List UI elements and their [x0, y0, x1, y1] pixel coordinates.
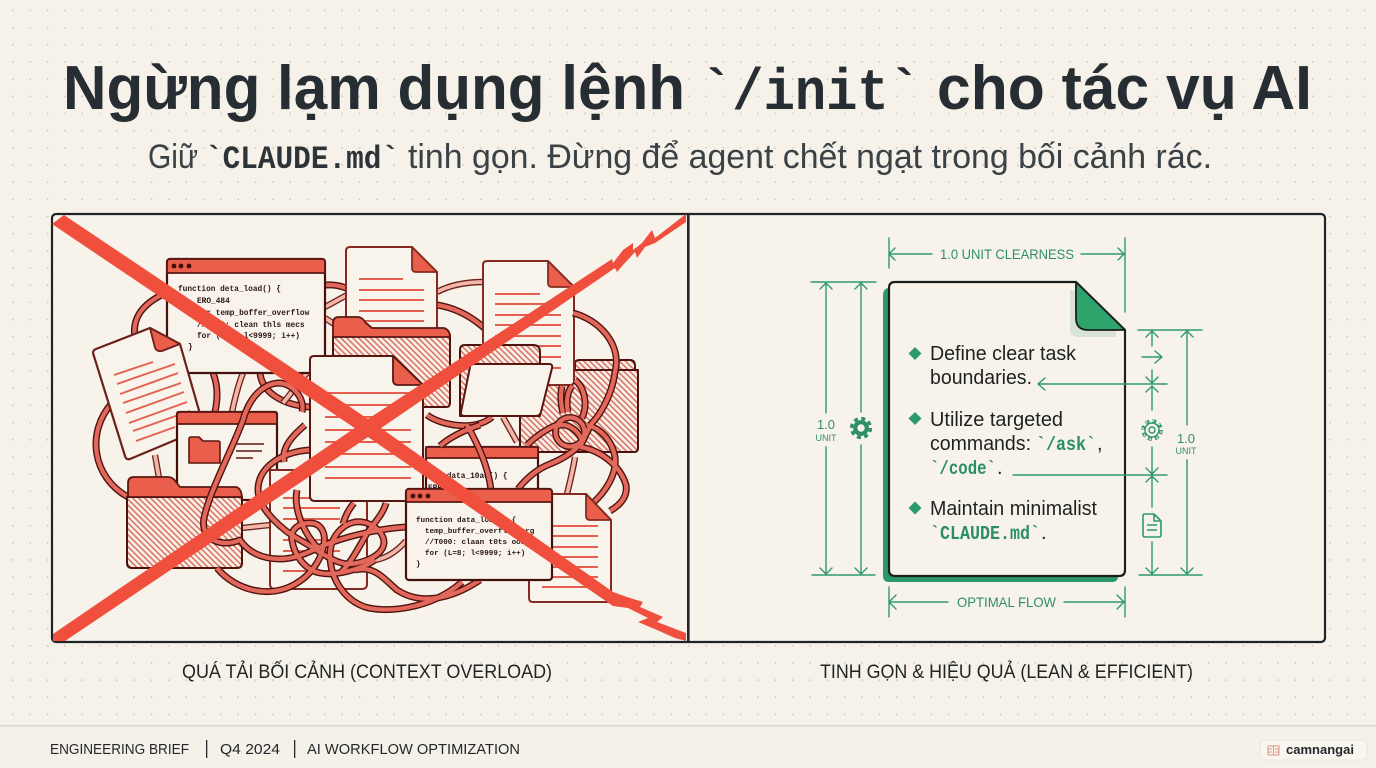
bullet 1: boundaries.: [930, 367, 1032, 389]
bullet 3: .: [1041, 522, 1047, 544]
subtitle: `CLAUDE.md`: [205, 141, 399, 178]
bullet 1: Define clear task: [930, 343, 1077, 365]
code window: top left: ERO_484: [197, 298, 230, 306]
caption: efficient: TINH GỌN & HIỆU QUẢ (LEAN & EFFICIENT): [820, 661, 1193, 683]
bullet 3: Maintain minimalist: [930, 498, 1097, 520]
bullet 3: `CLAUDE.md`: [930, 523, 1040, 545]
code window: front: function data_load() {: [416, 517, 516, 525]
right dimension: 1.0: [1177, 431, 1195, 446]
left dimension: [811, 282, 876, 575]
title: Ngừng lạm dụng lệnh: [63, 54, 685, 123]
code window: front: [406, 489, 552, 580]
subtitle: tinh gọn. Đừng để agent chết ngạt trong bối cảnh rác.: [408, 138, 1212, 176]
document: [889, 282, 1125, 576]
bullet 2: `/ask`: [1036, 434, 1096, 456]
code window: behind: ERR 404: [428, 485, 461, 493]
bullet 2: Utilize targeted: [930, 409, 1063, 431]
code window: front: for (L=8; l<9999; i++): [425, 550, 525, 558]
right dimension: [1013, 330, 1202, 575]
top dimension: 1.0 UNIT CLEARNESS: [940, 246, 1074, 262]
comparison frame: [52, 214, 1325, 642]
document shadow: [883, 288, 1118, 582]
icon: document: [1143, 514, 1161, 537]
fold shadow: [1070, 290, 1116, 337]
tangled cables: [204, 383, 480, 610]
folder: centre hatched: [333, 317, 450, 407]
folder: right hatched: [520, 360, 638, 452]
document: top centre: [346, 247, 437, 340]
footer: [0, 725, 1376, 768]
bullet 2: commands:: [930, 433, 1031, 455]
folder: lower left: [127, 477, 242, 568]
document: centre: [310, 356, 423, 501]
bullet 2: .: [997, 457, 1003, 479]
title: [63, 54, 1312, 127]
title: cho tác vụ AI: [937, 54, 1312, 123]
bullet 3: [908, 498, 1097, 545]
document: lower centre: [270, 470, 367, 589]
footer: AI WORKFLOW OPTIMIZATION: [307, 741, 520, 758]
icon: book: [1268, 746, 1279, 755]
title: `/init`: [701, 62, 920, 127]
left dimension: 1.0: [817, 417, 835, 432]
bullet 2: [908, 409, 1103, 480]
code window: top left: [167, 259, 325, 373]
left dimension: UNIT: [816, 433, 837, 443]
document: top right: [483, 261, 574, 385]
back cables: [96, 282, 517, 528]
bullet 2: `/code`: [930, 458, 996, 480]
right dimension: UNIT: [1176, 446, 1197, 456]
red cross: [52, 214, 686, 641]
divider: [687, 214, 690, 642]
code window: front: }: [416, 561, 421, 569]
fold: [1076, 282, 1125, 330]
code window: top left: //TODO: clean thls mecs: [197, 322, 305, 330]
subtitle: Giữ: [148, 138, 198, 176]
window: folder icon: [177, 412, 277, 500]
icon: solid gear: [852, 418, 870, 438]
bullet 2: ,: [1097, 433, 1103, 455]
code window: top left: var temp_boffer_overflow: [197, 310, 310, 318]
badge: camnangai: camnangai: [1286, 742, 1354, 757]
bullet 1: [908, 343, 1077, 389]
code window: front: temp_buffer_overflow_arg: [425, 528, 535, 536]
document: tilted: [93, 328, 204, 459]
bottom dimension: OPTIMAL FLOW: [957, 594, 1057, 610]
caption: overload: QUÁ TẢI BỐI CẢNH (CONTEXT OVERLOAD): [182, 661, 552, 683]
code window: top left: function deta_load() {: [178, 286, 281, 294]
badge: camnangai: [1260, 740, 1367, 760]
code window: top left: }: [188, 344, 193, 352]
code window: top left: for (i=0; l<9999; i++): [197, 333, 300, 341]
footer: ENGINEERING BRIEF: [50, 741, 189, 758]
code window: front: //T000: claan t0ts ooss: [425, 539, 530, 547]
top dimension: [889, 238, 1125, 312]
code window: behind: int data_10ad() {: [428, 473, 508, 481]
panel: context overload: [52, 214, 686, 641]
folder: open: [460, 345, 552, 416]
panel: lean and efficient: [811, 238, 1202, 617]
icon: outline gear: [1143, 421, 1161, 439]
document: lower right: [529, 494, 611, 602]
code window: behind: [426, 447, 538, 555]
knot cables: right: [440, 313, 626, 511]
footer: Q4 2024: [220, 741, 280, 758]
bottom dimension: [889, 587, 1125, 617]
